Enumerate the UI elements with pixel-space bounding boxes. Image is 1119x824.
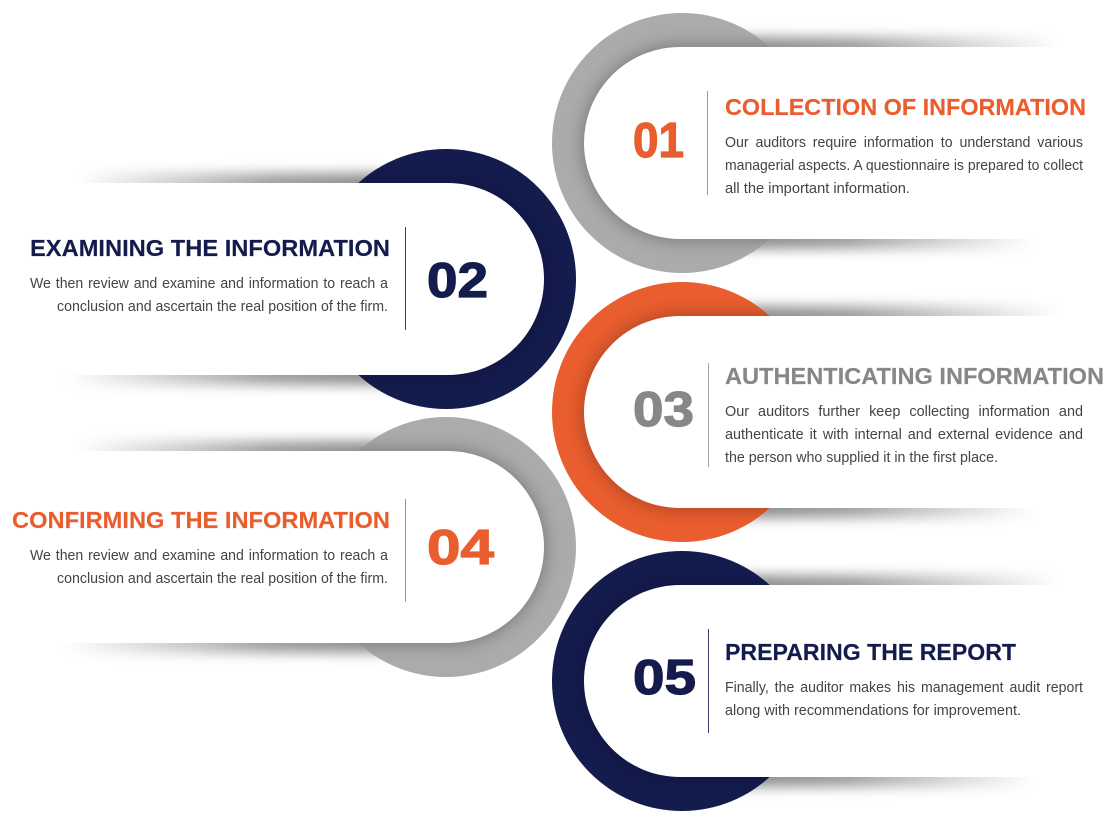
divider 02 [405, 227, 406, 330]
card 04: confirming the information [0, 417, 576, 677]
body text 03: authenticate it with internal and external evidence and [725, 427, 1083, 443]
body text 04: conclusion and ascertain the real position of the firm. [57, 571, 388, 587]
white pill 05 [584, 585, 1119, 777]
number 05: 05 [633, 651, 696, 705]
body text 02: conclusion and ascertain the real position of the firm. [57, 299, 388, 315]
ring 02 [316, 149, 576, 409]
heading 04: CONFIRMING THE INFORMATION [12, 507, 390, 533]
white pill 01 [584, 47, 1119, 239]
number 02: 02 [427, 254, 488, 308]
card 02: examining the information [0, 149, 576, 409]
pill shadows 05 [740, 575, 1060, 787]
divider 04 [405, 499, 406, 602]
body text 04: We then review and examine and information to reach a [30, 548, 389, 564]
white pill 04 [0, 451, 544, 643]
pill shadows 02 [65, 173, 385, 385]
heading 02: EXAMINING THE INFORMATION [30, 235, 390, 261]
body text 03: Our auditors further keep collecting information and [725, 404, 1083, 420]
card 01: collection of information [552, 13, 1119, 273]
body text 04 [30, 548, 389, 587]
body text 02: We then review and examine and information to reach a [30, 276, 389, 292]
body text 01: Our auditors require information to understand various [725, 135, 1083, 151]
body text 05: along with recommendations for improvement. [725, 703, 1021, 719]
body text 02 [30, 276, 389, 315]
pill shadows 01 [740, 37, 1060, 249]
pill shadows 04 [65, 441, 385, 653]
body text 01: all the important information. [725, 181, 910, 197]
white pill 03 [584, 316, 1119, 508]
heading 03: AUTHENTICATING INFORMATION [725, 363, 1104, 389]
heading 01: COLLECTION OF INFORMATION [725, 94, 1086, 120]
ring 04 [316, 417, 576, 677]
body text 05 [725, 680, 1083, 719]
divider 03 [708, 363, 709, 467]
body text 01 [725, 135, 1083, 197]
divider 01 [707, 91, 708, 195]
card 03: authenticating information [552, 282, 1119, 542]
body text 03: the person who supplied it in the first place. [725, 450, 998, 466]
heading 05: PREPARING THE REPORT [725, 639, 1016, 665]
number 04: 04 [427, 521, 494, 575]
ring 01 [552, 13, 812, 273]
body text 05: Finally, the auditor makes his management audit report [725, 680, 1083, 696]
pill shadows 03 [740, 306, 1060, 518]
number 01: 01 [633, 114, 684, 168]
card 05: preparing the report [552, 551, 1119, 811]
white pill 02 [0, 183, 544, 375]
ring 05 [552, 551, 812, 811]
ring 03 [552, 282, 812, 542]
body text 03 [725, 404, 1083, 466]
body text 01: managerial aspects. A questionnaire is prepared to collect [725, 158, 1083, 174]
number 03: 03 [633, 383, 694, 437]
divider 05 [708, 629, 709, 733]
